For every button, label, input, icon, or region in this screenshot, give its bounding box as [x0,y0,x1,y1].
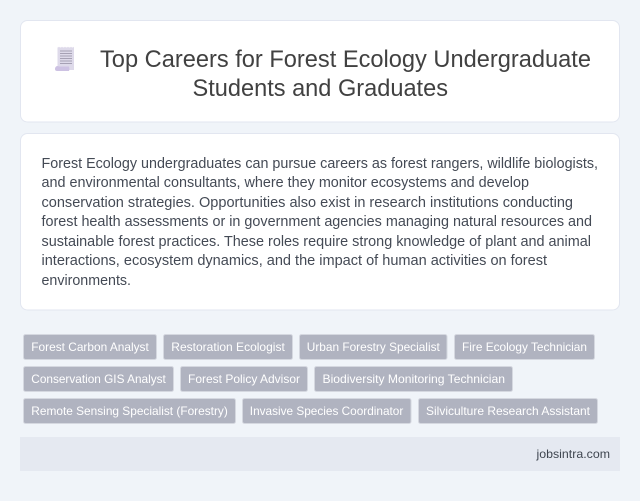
description text: interactions, ecosystem dynamics, and the impact of human activities on forest [42,253,547,269]
tag: Biodiversity Monitoring Technician [314,366,512,392]
tag: Restoration Ecologist [164,334,292,360]
description text: Forest Ecology undergraduates can pursue careers as forest rangers, wildlife biologists, [42,156,598,172]
description text [42,156,598,289]
tag: Conservation GIS Analyst: Conservation GIS Analyst [31,372,166,386]
tag: Fire Ecology Technician [454,334,594,360]
tag: Remote Sensing Specialist (Forestry) [24,398,236,424]
tag: Biodiversity Monitoring Technician: Biodiversity Monitoring Technician [322,372,505,386]
tag: Invasive Species Coordinator [242,398,411,424]
tag: Remote Sensing Specialist (Forestry): Remote Sensing Specialist (Forestry) [31,404,228,418]
tag: Urban Forestry Specialist [300,334,447,360]
description panel [20,134,620,310]
career tags [24,334,598,424]
description text: forest health assessments or in government agencies managing natural resources and [42,214,592,230]
icon: paper scroll [55,47,74,71]
tag: Silviculture Research Assistant [418,398,598,424]
title: Students and Graduates [192,75,448,102]
tag: Silviculture Research Assistant: Silviculture Research Assistant [426,404,591,418]
description text: conservation strategies. Opportunities also exist in research institutions conducting [42,195,573,211]
tag: Forest Policy Advisor: Forest Policy Advisor [188,372,300,386]
tag: Conservation GIS Analyst [24,366,174,392]
tag: Urban Forestry Specialist: Urban Forestry Specialist [307,340,440,354]
footer bar [20,437,620,471]
description text: sustainable forest practices. These roles require strong knowledge of plant and animal [42,234,591,250]
title: Top Careers for Forest Ecology Undergraduate [100,46,591,73]
tag: Invasive Species Coordinator: Invasive Species Coordinator [250,404,403,418]
description text: environments. [42,273,131,289]
footer source text: jobsintra.com [535,447,610,461]
description text: and environmental consultants, where they monitor ecosystems and develop [42,175,529,191]
tag: Forest Policy Advisor [180,366,308,392]
tag: Forest Carbon Analyst: Forest Carbon Analyst [31,340,149,354]
title [100,46,591,102]
tag: Fire Ecology Technician: Fire Ecology Technician [462,340,587,354]
header panel [20,20,620,122]
tag: Forest Carbon Analyst [24,334,156,360]
tag: Restoration Ecologist: Restoration Ecologist [171,340,285,354]
